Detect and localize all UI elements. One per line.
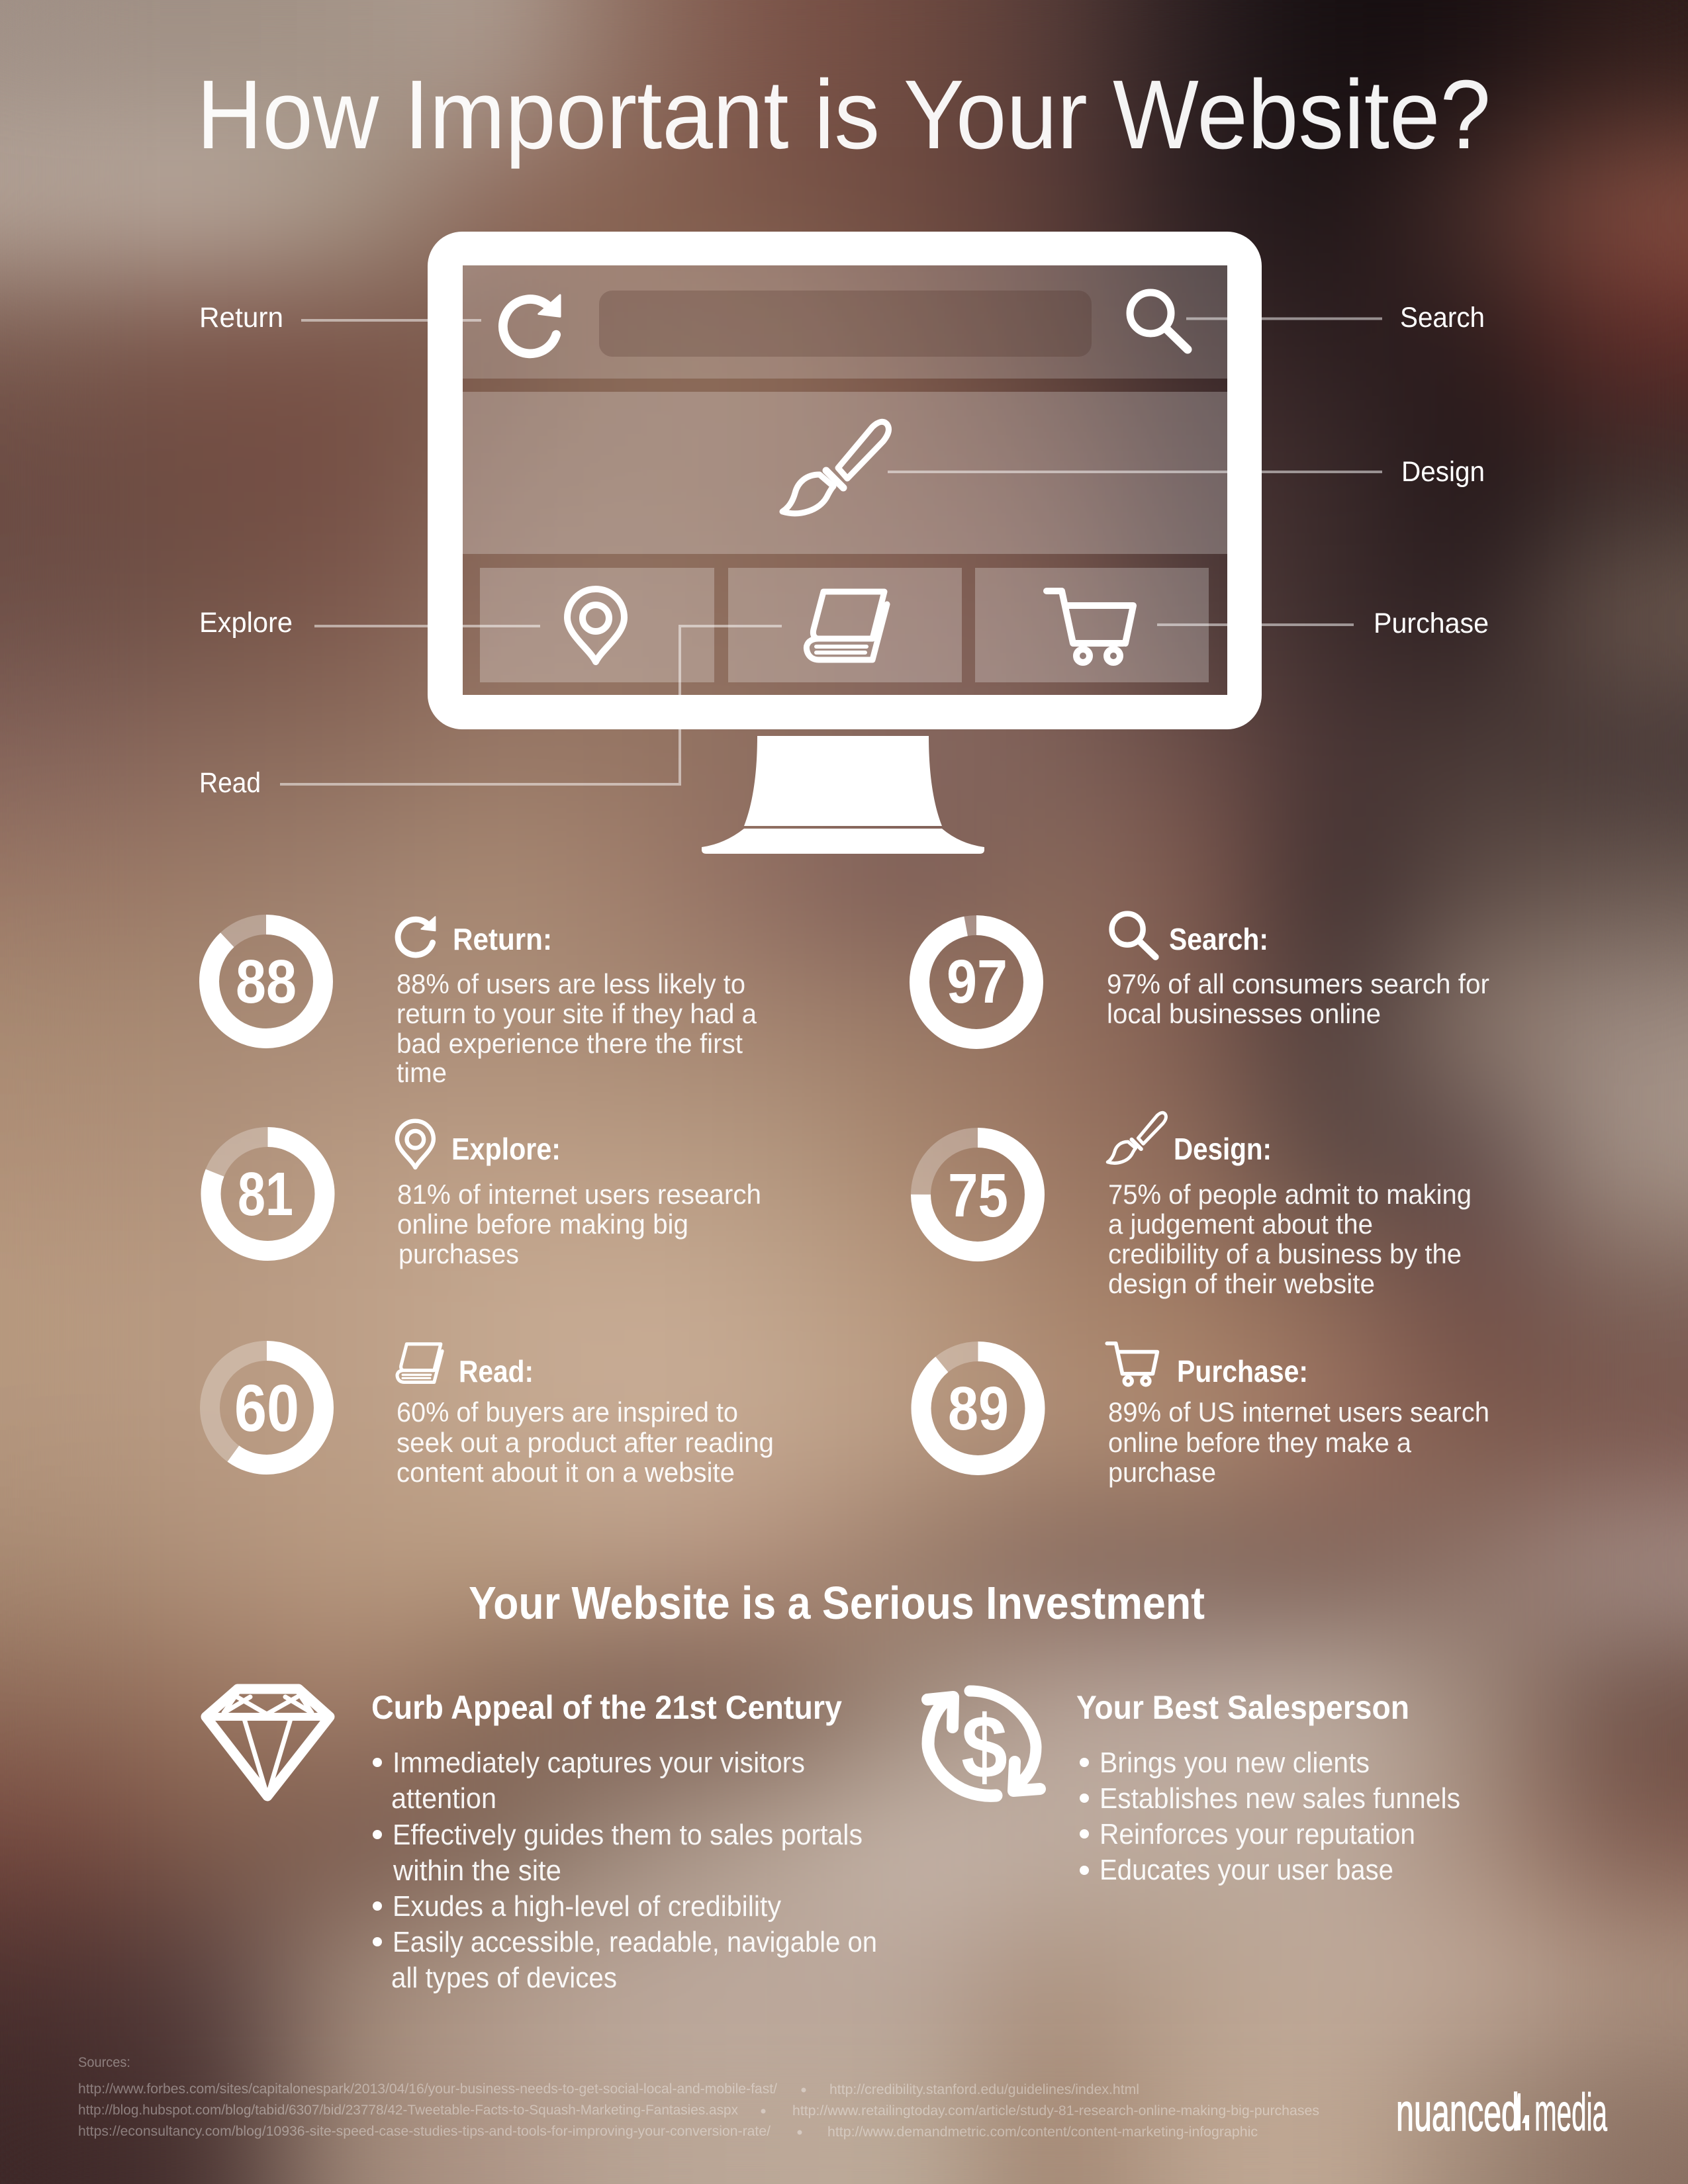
callout: read [199,626,782,799]
icon: money cycle: $ [961,1697,1008,1797]
bullet list: Educates your user base [1100,1854,1393,1886]
stat: purchase 89 [921,1343,1489,1488]
bullet list: Establishes new sales funnels [1100,1782,1460,1815]
callout: return: Return [199,302,283,334]
icon: cart [1047,591,1133,662]
donut 75 [921,1138,1035,1251]
bullet list: attention [391,1782,496,1815]
donut 75: 75 [948,1161,1008,1230]
donut 88 [209,925,323,1038]
stat: return 88 [209,917,757,1088]
tile: explore [480,568,714,682]
stat text: 81% of internet users research [397,1179,761,1210]
icon: cart [1107,1343,1157,1385]
sources: http://blog.hubspot.com/blog/tabid/6307/bid/23778/42-Tweetable-Facts-to-Squash-Marketing-Fantasies.aspx [78,2103,738,2118]
donut 81 [211,1137,324,1251]
icon: return [503,295,560,353]
bullet list: Immediately captures your visitors [393,1747,805,1779]
donut 89 [921,1351,1035,1465]
bullet list: all types of devices [391,1962,617,1994]
stat text: 88% of users are less likely to [397,968,745,999]
monitor base [702,829,984,854]
stat text: design of their website [1108,1268,1375,1299]
icon: book [397,1344,442,1382]
tile: purchase [975,568,1209,682]
stat text: local businesses online [1107,998,1381,1029]
callout: purchase: Purchase [1374,608,1489,639]
stat text: content about it on a website [397,1457,735,1488]
stat text: 97% of all consumers search for [1107,968,1489,999]
stat text [1107,968,1489,1029]
bullet list: within the site [393,1854,561,1887]
stat heading: Return: [453,922,552,956]
icon: pin [397,1121,434,1167]
donut 89: 89 [948,1374,1009,1443]
sources: http://www.retailingtoday.com/article/study-81-research-online-making-big-purchases [792,2103,1319,2118]
icon: diamond [206,1689,330,1796]
stat: search 97 [919,914,1489,1039]
stat text: online before making big [397,1208,688,1240]
stat text: credibility of a business by the [1108,1238,1462,1269]
screen panel: toolbar [463,265,1227,379]
callout: search: Search [1400,302,1485,334]
panel heading: Your Best Salesperson [1076,1689,1409,1726]
stat: explore 81 [211,1121,761,1269]
stat text: 75% of people admit to making [1108,1179,1472,1210]
monitor illustration [428,232,1262,854]
stat text: 89% of US internet users search [1108,1396,1489,1428]
panel: curb appeal [206,1689,877,1994]
stat text: 60% of buyers are inspired to [397,1396,738,1428]
sources: http://www.demandmetric.com/content/content-marketing-infographic [827,2124,1258,2140]
stat heading: Purchase: [1177,1354,1308,1388]
sources: Sources: [78,2055,130,2070]
bullet list [373,1747,877,1994]
sources [78,2055,1319,2140]
stat text: return to your site if they had a [397,998,757,1029]
stat heading: Search: [1169,922,1268,956]
icon: search [1112,914,1156,957]
stat text: online before they make a [1108,1427,1412,1458]
bullet list [1080,1747,1460,1886]
icon: book [806,592,887,660]
bullet list: Effectively guides them to sales portals [393,1819,863,1851]
stat heading: Explore: [451,1132,561,1166]
stat text: seek out a product after reading [397,1427,774,1458]
stat: read 60 [210,1344,774,1488]
title: How Important is Your Website? [197,60,1491,169]
bullet list: Easily accessible, readable, navigable on [393,1926,877,1958]
sources: http://www.forbes.com/sites/capitalonespark/2013/04/16/your-business-needs-to-get-social-local-and-mobile-fast/ [78,2081,777,2097]
stat text: bad experience there the first [397,1028,743,1059]
stat text [397,1179,761,1269]
icon: pin [567,589,624,662]
tile: read [728,568,962,682]
bullet list: Reinforces your reputation [1100,1818,1415,1850]
icon: brush [782,422,888,514]
stat text: purchases [399,1238,519,1269]
sources: http://credibility.stanford.edu/guidelines/index.html [829,2082,1139,2097]
callout: explore: Explore [199,607,293,639]
icon: money cycle [927,1691,1040,1797]
logo: nuanced media: nuanced [1396,2083,1519,2142]
stat text: a judgement about the [1108,1208,1373,1240]
icon: brush [1107,1113,1166,1163]
donut 97: 97 [947,947,1008,1016]
sources: https://econsultancy.com/blog/10936-site-speed-case-studies-tips-and-tools-for-improving-your-conversion-rate/ [78,2124,771,2139]
stat text: purchase [1108,1457,1216,1488]
stat heading: Read: [459,1354,534,1388]
icon: return [398,917,435,955]
donut 81: 81 [238,1160,293,1228]
stat text [1108,1179,1472,1299]
stat text [397,1396,774,1488]
panel heading: Curb Appeal of the 21st Century [371,1689,842,1726]
stat text [397,968,757,1088]
stat heading: Design: [1174,1132,1272,1166]
bullet list: Exudes a high-level of credibility [393,1890,781,1923]
screen panel: banner [463,392,1227,554]
panel: best salesperson [927,1689,1460,1886]
donut 60 [210,1351,324,1465]
icon: search [1130,293,1188,349]
donut 97 [919,925,1033,1039]
callout: design: Design [1401,456,1485,488]
stat text: time [397,1057,447,1088]
donut 60: 60 [234,1371,299,1445]
stat text [1108,1396,1489,1488]
monitor frame [428,232,1262,729]
section heading: Your Website is a Serious Investment [469,1577,1205,1629]
monitor stand [744,736,942,826]
address bar [599,291,1092,357]
bullet list: Brings you new clients [1100,1747,1370,1779]
callout: read: Read [199,767,261,799]
donut 88: 88 [236,947,297,1016]
logo: nuanced media: media [1534,2083,1607,2142]
stat: design 75 [921,1113,1472,1299]
